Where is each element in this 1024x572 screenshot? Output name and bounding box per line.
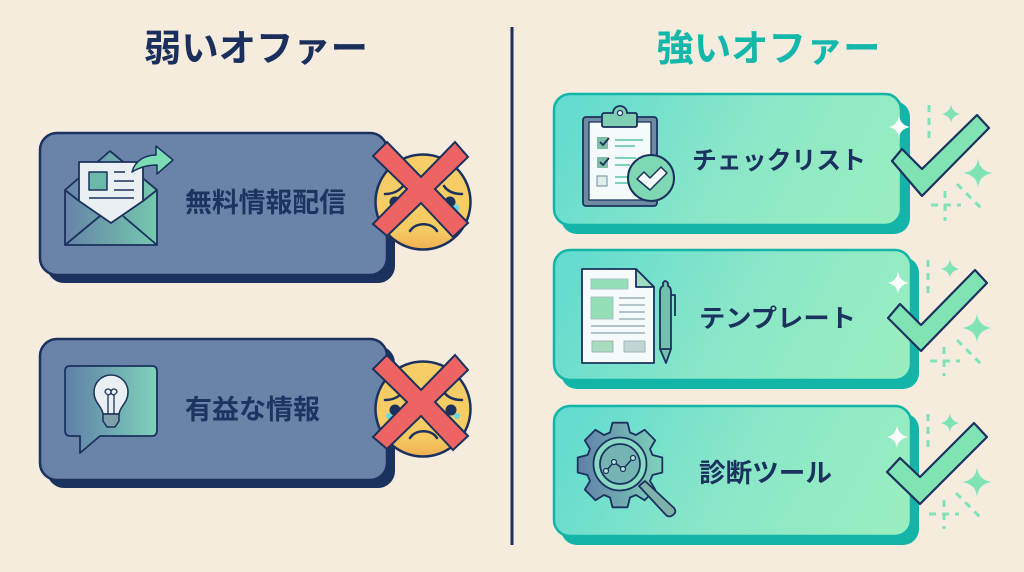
icon: document and pen [582, 269, 675, 363]
center divider [510, 27, 514, 545]
title: weak offers: 弱いオファー [144, 28, 368, 69]
icon: gear with magnifier [578, 423, 675, 516]
label: チェックリスト [692, 147, 866, 175]
icon: crossed-out sad face [373, 142, 470, 250]
label: 診断ツール [699, 458, 832, 488]
icon: checkmark with sparkles [888, 259, 992, 376]
panel: checklist [554, 94, 993, 234]
icon: checkmark with sparkles [887, 413, 992, 529]
icon: envelope with document [65, 146, 173, 245]
icon: checkmark with sparkles [889, 104, 993, 221]
icon: clipboard with check badge [583, 106, 674, 206]
panel: diagnostic tool [554, 406, 992, 545]
label: 有益な情報 [185, 395, 320, 425]
label: テンプレート [699, 305, 856, 333]
panel: useful information [40, 339, 470, 488]
panel: template [554, 250, 992, 389]
label: 無料情報配信 [185, 188, 346, 218]
panel: free information delivery [40, 133, 470, 283]
title: strong offers: 強いオファー [656, 28, 880, 69]
icon: crossed-out sad face [373, 355, 470, 456]
icon: speech bubble with light bulb [65, 366, 157, 453]
